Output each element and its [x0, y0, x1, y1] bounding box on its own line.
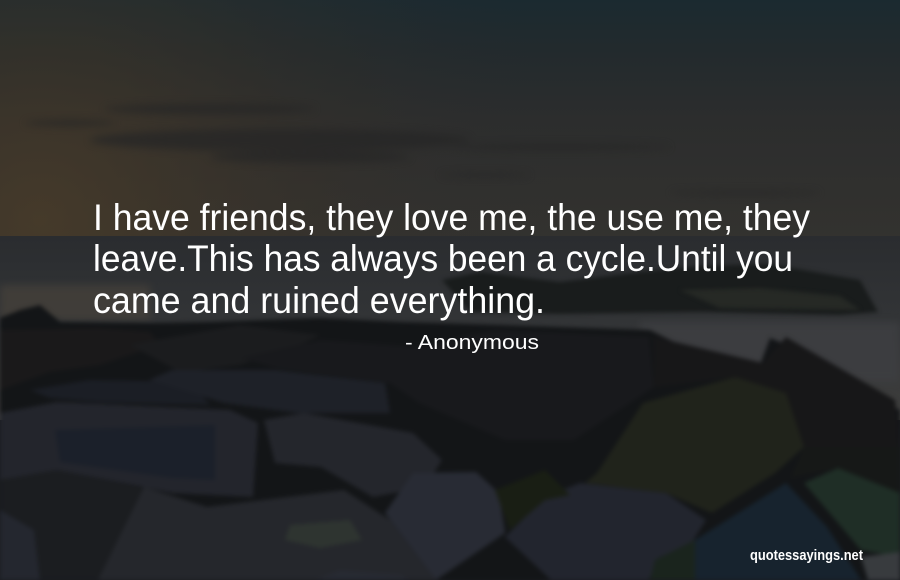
watermark: quotessayings.net	[750, 547, 863, 564]
quote text: I have friends, they love me, the use me, they	[93, 197, 810, 238]
photo background: sea and shore	[0, 236, 900, 420]
quote text	[93, 197, 810, 321]
photo background: dusk sky	[0, 0, 900, 240]
attribution: - Anonymous	[405, 332, 539, 354]
quote text: leave.This has always been a cycle.Until you	[93, 238, 793, 279]
photo background: rocks	[0, 305, 900, 580]
quote text: came and ruined everything.	[93, 280, 545, 321]
